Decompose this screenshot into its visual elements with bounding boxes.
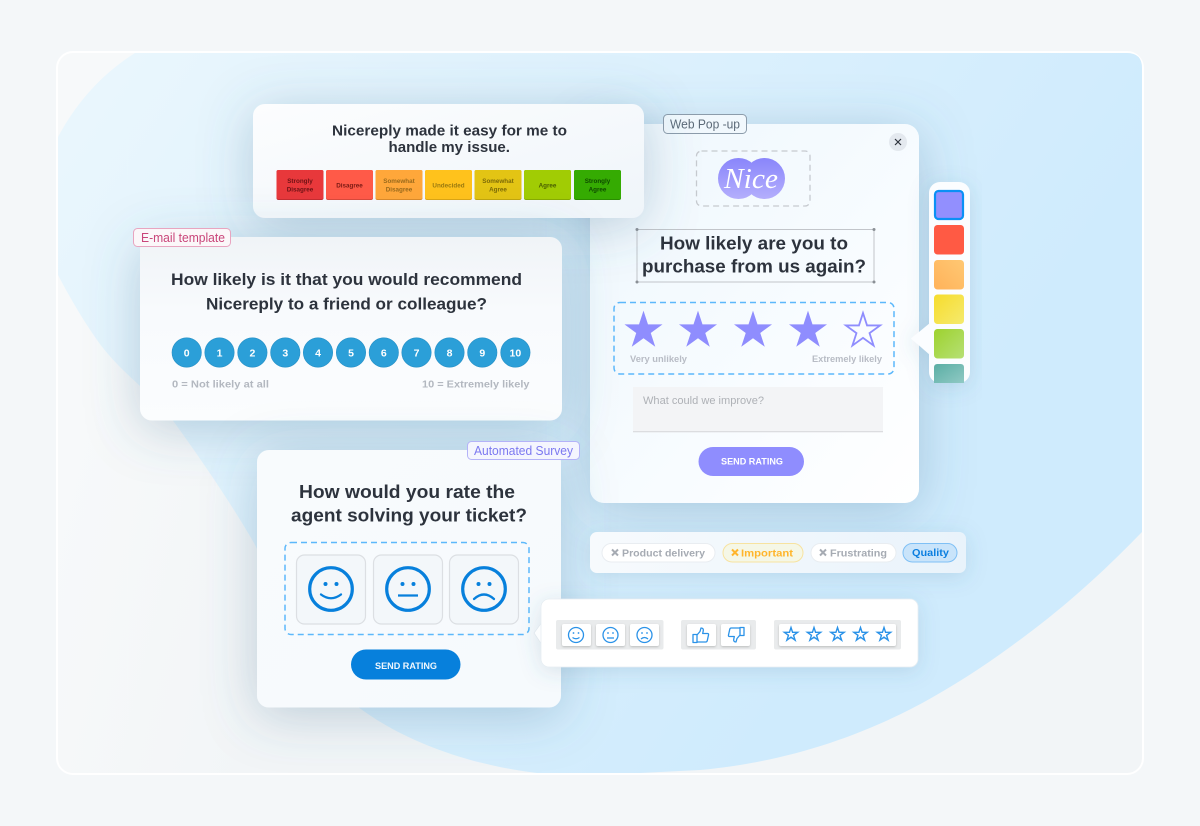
tag: product delivery bbox=[602, 544, 715, 562]
comment field: What could we improve? bbox=[643, 395, 764, 407]
label: web pop-up bbox=[664, 114, 746, 134]
NPS scale 0 to 10 bbox=[172, 338, 530, 367]
tag: product delivery: Product delivery bbox=[622, 548, 705, 560]
panel: rating style picker bbox=[534, 599, 918, 667]
NPS scale 0 to 10: 4 bbox=[315, 347, 321, 359]
likert buttons: Agree bbox=[489, 186, 507, 194]
logo placeholder bbox=[696, 151, 810, 206]
e-mail question: How likely is it that you would recommend bbox=[171, 270, 522, 289]
likert question bbox=[332, 124, 567, 156]
smiley style group bbox=[556, 620, 664, 650]
logo placeholder: Nice bbox=[723, 164, 778, 195]
likert buttons: Undecided bbox=[432, 182, 465, 190]
label: e-mail template: E-mail template bbox=[141, 231, 225, 245]
smiley options bbox=[285, 542, 529, 634]
send rating button blue: SEND RATING bbox=[375, 661, 437, 672]
likert buttons: Somewhat bbox=[482, 178, 515, 185]
likert question: Nicereply made it easy for me to bbox=[332, 124, 567, 140]
NPS scale 0 to 10: 0 bbox=[184, 347, 190, 359]
scale captions bbox=[172, 378, 530, 390]
background frame bbox=[57, 52, 1143, 774]
NPS scale 0 to 10: 5 bbox=[348, 347, 354, 359]
label: web pop-up: Web Pop -up bbox=[670, 118, 740, 132]
likert buttons: Disagree bbox=[287, 186, 314, 194]
send rating button purple bbox=[698, 447, 804, 476]
tag: quality: Quality bbox=[912, 547, 949, 559]
tag: frustrating: Frustrating bbox=[830, 548, 887, 560]
NPS scale 0 to 10: 1 bbox=[217, 347, 223, 359]
send rating button purple: SEND RATING bbox=[721, 456, 783, 468]
NPS scale 0 to 10: 8 bbox=[447, 347, 453, 359]
popup question bbox=[636, 228, 876, 284]
likert buttons: Agree bbox=[589, 186, 607, 194]
panel: automated survey bbox=[257, 450, 561, 708]
tag: frustrating bbox=[811, 544, 896, 562]
panel: e-mail template bbox=[140, 237, 562, 420]
send rating button blue bbox=[351, 650, 460, 680]
star rating: Very unlikely bbox=[630, 354, 687, 364]
NPS scale 0 to 10: 3 bbox=[282, 347, 288, 359]
e-mail question bbox=[171, 270, 522, 314]
thumbs style group bbox=[681, 620, 756, 650]
panel: likert scale bbox=[253, 104, 644, 218]
likert question: handle my issue. bbox=[388, 140, 510, 156]
likert buttons: Strongly bbox=[287, 178, 313, 185]
likert buttons: Disagree bbox=[386, 186, 413, 194]
NPS scale 0 to 10: 9 bbox=[479, 347, 485, 359]
survey question: How would you rate the bbox=[299, 481, 515, 502]
label: automated survey: Automated Survey bbox=[474, 444, 574, 458]
background blue blob bbox=[58, 53, 1142, 773]
tag: quality bbox=[903, 544, 957, 562]
panel: tags bbox=[590, 532, 966, 573]
NPS scale 0 to 10: 6 bbox=[381, 347, 387, 359]
stars style group bbox=[774, 620, 901, 650]
popup question: How likely are you to bbox=[660, 232, 848, 254]
panel: colour swatches bbox=[911, 182, 970, 383]
close button bbox=[889, 133, 907, 151]
icon: sad face bbox=[463, 568, 505, 610]
likert buttons: Disagree bbox=[336, 182, 363, 190]
likert buttons: Somewhat bbox=[383, 178, 416, 185]
survey question: agent solving your ticket? bbox=[291, 504, 527, 526]
e-mail question: Nicereply to a friend or colleague? bbox=[206, 294, 487, 314]
scale captions: 10 = Extremely likely bbox=[422, 378, 530, 390]
scale captions: 0 = Not likely at all bbox=[172, 378, 269, 390]
star rating bbox=[614, 302, 894, 374]
popup question: purchase from us again? bbox=[642, 256, 866, 276]
NPS scale 0 to 10: 2 bbox=[249, 347, 255, 359]
survey question bbox=[291, 481, 527, 526]
NPS scale 0 to 10: 10 bbox=[510, 347, 521, 359]
likert buttons bbox=[276, 170, 621, 200]
panel: web pop-up bbox=[590, 124, 919, 503]
likert buttons: Agree bbox=[539, 182, 557, 190]
star rating: Extremely likely bbox=[812, 354, 882, 364]
likert buttons: Strongly bbox=[585, 178, 611, 185]
tag: important bbox=[723, 544, 803, 562]
tag: important: Important bbox=[741, 548, 794, 560]
label: e-mail template bbox=[134, 228, 230, 246]
icon: happy face bbox=[310, 568, 352, 610]
comment field bbox=[633, 387, 883, 432]
NPS scale 0 to 10: 7 bbox=[414, 347, 420, 359]
icon: neutral face bbox=[387, 568, 429, 610]
